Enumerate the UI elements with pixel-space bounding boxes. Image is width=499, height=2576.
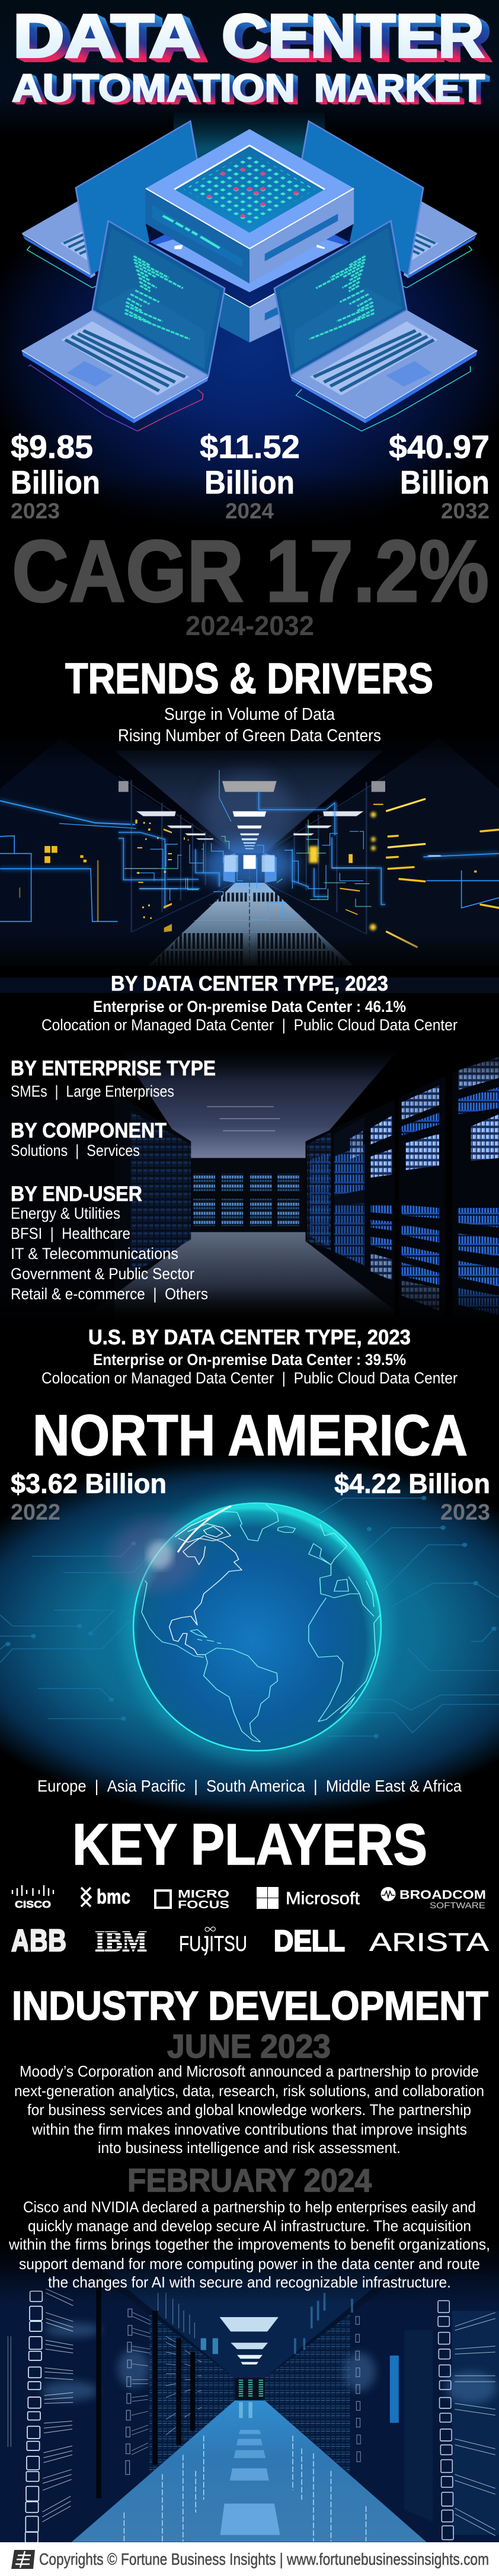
stat: 2023: Billion bbox=[11, 464, 100, 501]
front right laptop bbox=[274, 221, 478, 431]
by end-user bbox=[11, 1183, 208, 1303]
stat: 2032: 2032 bbox=[441, 499, 490, 523]
left rack wall bbox=[0, 2272, 235, 2542]
development: june 2023: for business services and global knowledge workers. The partnership bbox=[27, 2101, 471, 2119]
neon circuit lines, glow bbox=[119, 792, 385, 908]
by data center type heading: Colocation or Managed Data Center | Public Cloud Data Center bbox=[41, 1016, 458, 1034]
continents bbox=[142, 1504, 380, 1742]
key players heading: KEY PLAYERS bbox=[72, 1812, 427, 1877]
logo: fujitsu bbox=[179, 1927, 247, 1956]
stat: 2024 bbox=[200, 428, 300, 523]
floor bbox=[148, 883, 354, 966]
stat: 2022: 2022 bbox=[11, 1500, 60, 1525]
title line 2: AUTOMATION bbox=[12, 66, 295, 110]
image: blue server corridor bbox=[0, 2237, 499, 2543]
floor light streaks bbox=[124, 2436, 366, 2542]
by component: Solutions | Services bbox=[11, 1142, 140, 1159]
icon: fortune business insights logo bbox=[11, 2550, 35, 2569]
title line 1: DATA bbox=[13, 2, 200, 70]
other regions: Europe | Asia Pacific | South America | Middle East & Africa bbox=[37, 1777, 462, 1795]
globe background bbox=[0, 1446, 499, 1825]
image: data center corridor with circuit lines bbox=[0, 711, 499, 993]
ceiling lights bbox=[119, 781, 385, 849]
U.S. by data center type: Colocation or Managed Data Center | Public Cloud Data Center bbox=[41, 1369, 458, 1387]
U.S. by data center type: Enterprise or On-premise Data Center : 39.5% bbox=[93, 1351, 406, 1369]
stat: 2032 bbox=[389, 428, 490, 523]
stat: 2022: $3.62 Billion bbox=[11, 1468, 167, 1499]
floor bbox=[72, 2401, 427, 2542]
logo: broadcom: BROADCOM bbox=[399, 1888, 486, 1902]
development: june 2023: within the firm makes innovative contributions that improve insights bbox=[31, 2120, 467, 2138]
rack detail, right bbox=[295, 2293, 495, 2540]
logo: bmc: bmc bbox=[97, 1886, 130, 1908]
yellow lights bbox=[135, 804, 383, 932]
floor bbox=[76, 1232, 411, 1323]
logo: cisco bbox=[12, 1885, 53, 1910]
development: february 2024: the changes for AI with secure and recognizable infrastructure. bbox=[48, 2273, 451, 2291]
lower server bbox=[149, 190, 350, 342]
logo: microsoft: Microsoft bbox=[286, 1889, 360, 1908]
title line 1: CENTER bbox=[222, 2, 484, 70]
title line 2: AUTOMATION bbox=[12, 66, 295, 110]
by enterprise type bbox=[11, 1057, 216, 1100]
logo: broadcom bbox=[380, 1887, 486, 1911]
logo: abb: ABB bbox=[11, 1924, 66, 1958]
logo: dell: DELL bbox=[274, 1924, 345, 1957]
trends and drivers: TRENDS & DRIVERS bbox=[65, 655, 433, 703]
trends and drivers bbox=[65, 655, 433, 745]
stat: 2022 bbox=[11, 1468, 167, 1525]
rack highlights bbox=[41, 2323, 497, 2404]
stat: 2024: Billion bbox=[204, 464, 295, 501]
stat: 2023: $4.22 Billion bbox=[334, 1468, 490, 1499]
logo: bmc bbox=[81, 1886, 130, 1908]
ceiling lights bbox=[220, 2317, 279, 2331]
by end-user: IT & Telecommunications bbox=[11, 1245, 178, 1263]
by end-user: Retail & e-commerce | Others bbox=[11, 1285, 208, 1303]
development: february 2024: quickly manage and develop secure AI infrastructure. The acquisition bbox=[28, 2217, 471, 2235]
development: june 2023: JUNE 2023 bbox=[167, 2027, 331, 2065]
status lights bbox=[206, 168, 299, 218]
illustration: server with four laptops bbox=[22, 121, 478, 431]
corridor ceiling bbox=[95, 2263, 404, 2378]
corridor end glow bbox=[201, 841, 296, 889]
development: june 2023: into business intelligence and risk assessment. bbox=[98, 2139, 401, 2157]
stat: 2032: Billion bbox=[400, 464, 490, 501]
by end-user: Government & Public Sector bbox=[11, 1265, 194, 1283]
by end-user: BY END-USER bbox=[11, 1183, 142, 1206]
CAGR: 2024-2032 bbox=[185, 610, 314, 641]
left racks bbox=[0, 1096, 191, 1323]
stat: 2032: $40.97 bbox=[389, 428, 490, 465]
by component: BY COMPONENT bbox=[11, 1119, 167, 1142]
logo: broadcom: SOFTWARE bbox=[430, 1901, 485, 1911]
development: february 2024: support demand for more computing power in the data center and route bbox=[19, 2255, 480, 2273]
stat: 2024: $11.52 bbox=[200, 428, 300, 465]
by data center type heading: BY DATA CENTER TYPE, 2023 bbox=[111, 972, 388, 995]
by end-user: Energy & Utilities bbox=[11, 1204, 120, 1222]
trends and drivers: Surge in Volume of Data bbox=[164, 705, 335, 724]
central corridor bbox=[59, 751, 385, 966]
logos bbox=[11, 1885, 490, 1958]
title line 2: MARKET bbox=[314, 66, 485, 110]
logo: micro focus: FOCUS bbox=[178, 1899, 229, 1911]
stat: 2023: 2023 bbox=[440, 1500, 490, 1525]
upper server bbox=[146, 129, 354, 284]
globe bbox=[111, 1493, 391, 1761]
development: february 2024 bbox=[8, 2162, 490, 2291]
stat: 2023: 2023 bbox=[11, 499, 60, 523]
by component bbox=[11, 1119, 167, 1159]
rack frames bbox=[119, 776, 385, 934]
stat: 2023: $9.85 bbox=[11, 428, 93, 465]
stat: 2023 bbox=[334, 1468, 490, 1525]
stat: 2024: 2024 bbox=[225, 499, 274, 523]
development: february 2024: within the firms brings together the improvements to benefit organizations, bbox=[8, 2235, 490, 2253]
by enterprise type: BY ENTERPRISE TYPE bbox=[11, 1057, 216, 1080]
logo: arista: ARISTA bbox=[369, 1928, 490, 1957]
right racks bbox=[306, 1050, 499, 1323]
neon circuit lines bbox=[59, 770, 385, 922]
logo: fujitsu: FUJITSU bbox=[179, 1931, 247, 1956]
back right laptop bbox=[301, 121, 478, 288]
logo: micro focus bbox=[155, 1888, 229, 1911]
development: february 2024: Cisco and NVIDIA declared a partnership to help enterprises easily and bbox=[23, 2198, 476, 2216]
title line 1: DATA bbox=[13, 2, 200, 70]
by end-user: BFSI | Healthcare bbox=[11, 1225, 130, 1242]
logo: cisco: CISCO bbox=[15, 1899, 51, 1910]
by data center type heading bbox=[41, 972, 458, 1034]
floor reflections bbox=[220, 2402, 280, 2535]
ceiling bbox=[121, 1050, 398, 1158]
title line 2: MARKET bbox=[314, 66, 485, 110]
by data center type heading: Enterprise or On-premise Data Center : 46.1% bbox=[93, 998, 406, 1015]
end wall bbox=[235, 2378, 265, 2400]
development: june 2023: Moody’s Corporation and Microsoft announced a partnership to provide bbox=[20, 2062, 479, 2080]
title bbox=[12, 2, 485, 110]
U.S. by data center type bbox=[41, 1326, 458, 1387]
back wall racks bbox=[191, 1158, 306, 1232]
front left laptop bbox=[22, 221, 225, 431]
logo: microsoft bbox=[257, 1887, 360, 1909]
trends and drivers: Rising Number of Green Data Centers bbox=[118, 726, 381, 745]
U.S. by data center type: U.S. BY DATA CENTER TYPE, 2023 bbox=[88, 1326, 411, 1349]
title line 1: CENTER bbox=[222, 2, 484, 70]
development: june 2023 bbox=[14, 2027, 484, 2157]
hero background bbox=[0, 0, 499, 533]
logo: micro focus: MICRO bbox=[178, 1888, 229, 1900]
title line 1 bbox=[13, 2, 484, 70]
image: server room bbox=[0, 1047, 499, 1326]
outer racks and lines bbox=[0, 738, 499, 993]
back left laptop bbox=[22, 121, 198, 288]
circuit traces bbox=[0, 1496, 499, 1738]
title line 2 bbox=[12, 66, 485, 110]
development: february 2024: FEBRUARY 2024 bbox=[127, 2162, 372, 2199]
stat: 2023 bbox=[11, 428, 100, 523]
by enterprise type: SMEs | Large Enterprises bbox=[11, 1082, 174, 1100]
rack detail, left bbox=[8, 2273, 215, 2543]
footer bbox=[0, 2542, 499, 2576]
logo: ibm: IBM bbox=[95, 1924, 147, 1957]
right rack wall bbox=[265, 2272, 499, 2542]
